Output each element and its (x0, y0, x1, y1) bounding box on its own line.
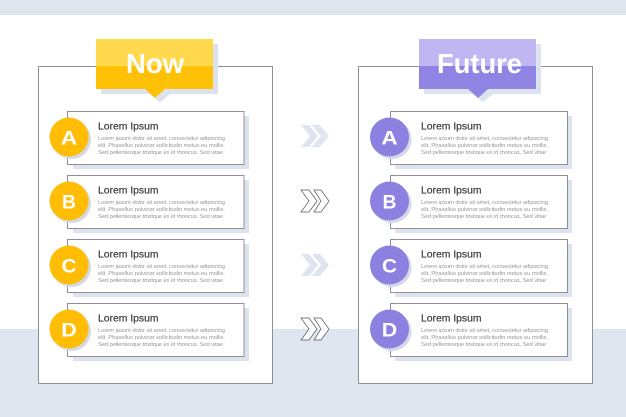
item: now D: Lorem Ipsum (98, 314, 158, 324)
item: future C: Lorem ipsum dolor sit amet, consectetur adipiscing (421, 264, 548, 270)
item: future D: Lorem ipsum dolor sit amet, consectetur adipiscing (421, 328, 548, 334)
heading: now: Now (126, 48, 185, 79)
item: future D: D (382, 320, 397, 342)
arrow: outline chevrons row 4 (301, 318, 329, 340)
item: now C (50, 240, 249, 297)
item: future A: Sed pellentesque tristique ex id rhoncus. Sed vitae (421, 150, 547, 156)
item: now C: Lorem Ipsum (98, 250, 158, 260)
item: now A (50, 112, 249, 169)
item: now C: Lorem ipsum dolor sit amet, consectetur adipiscing (98, 264, 225, 270)
item: now B: Lorem ipsum dolor sit amet, consectetur adipiscing (98, 200, 225, 206)
item: now B: elit. Phasellus pulvinar sollicitudin metus eu mollis. (98, 207, 225, 213)
panel: now (38, 39, 272, 384)
item: future B: Sed pellentesque tristique ex id rhoncus. Sed vitae (421, 214, 547, 220)
item: now D: Lorem ipsum dolor sit amet, consectetur adipiscing (98, 328, 225, 334)
item: future D: Lorem Ipsum (421, 314, 482, 324)
arrow: outline chevrons row 2 (301, 190, 329, 212)
heading: now (96, 39, 218, 102)
item: now B: Sed pellentesque tristique ex id rhoncus. Sed vitae (98, 214, 224, 220)
item: now D (50, 304, 249, 361)
item: now B: Lorem Ipsum (98, 186, 158, 196)
panel: future (358, 39, 592, 384)
item: now B: B (62, 192, 76, 214)
arrow: pale chevrons row 1 (301, 125, 329, 147)
item: future C: elit. Phasellus pulvinar sollicitudin metus eu mollis. (421, 271, 548, 277)
heading: future: Future (437, 48, 522, 79)
item: future D: Sed pellentesque tristique ex id rhoncus. Sed vitae (421, 342, 547, 348)
arrow: pale chevrons row 3 (301, 254, 329, 276)
item: future C: C (382, 256, 397, 278)
item: future C: Sed pellentesque tristique ex id rhoncus. Sed vitae (421, 278, 547, 284)
item: now A: elit. Phasellus pulvinar sollicitudin metus eu mollis. (98, 143, 225, 149)
item: future B: Lorem Ipsum (421, 186, 482, 196)
item: future B: elit. Phasellus pulvinar sollicitudin metus eu mollis. (421, 207, 548, 213)
item: now A: A (61, 128, 78, 150)
item: future C (370, 240, 572, 297)
item: now C: C (62, 256, 77, 278)
item: now A: Sed pellentesque tristique ex id rhoncus. Sed vitae (98, 150, 224, 156)
item: now B (50, 176, 249, 233)
item: now D: Sed pellentesque tristique ex id rhoncus. Sed vitae (98, 342, 224, 348)
heading: future (419, 39, 541, 102)
item: future B (370, 176, 572, 233)
item: future A (370, 112, 572, 169)
item: now D: D (61, 320, 77, 342)
item: now A: Lorem ipsum dolor sit amet, consectetur adipiscing (98, 136, 225, 142)
item: future A: Lorem Ipsum (421, 122, 482, 132)
item: future A: elit. Phasellus pulvinar sollicitudin metus eu mollis. (421, 143, 548, 149)
item: future B: B (382, 192, 396, 214)
item: future D: elit. Phasellus pulvinar sollicitudin metus eu mollis. (421, 335, 548, 341)
item: now D: elit. Phasellus pulvinar sollicitudin metus eu mollis. (98, 335, 225, 341)
item: now C: Sed pellentesque tristique ex id rhoncus. Sed vitae (98, 278, 224, 284)
item: future B: Lorem ipsum dolor sit amet, consectetur adipiscing (421, 200, 548, 206)
item: now C: elit. Phasellus pulvinar sollicitudin metus eu mollis. (98, 271, 225, 277)
item: future A: Lorem ipsum dolor sit amet, consectetur adipiscing (421, 136, 548, 142)
item: now A: Lorem Ipsum (98, 122, 158, 132)
item: future A: A (381, 128, 398, 150)
item: future D (370, 304, 572, 361)
item: future C: Lorem Ipsum (421, 250, 482, 260)
